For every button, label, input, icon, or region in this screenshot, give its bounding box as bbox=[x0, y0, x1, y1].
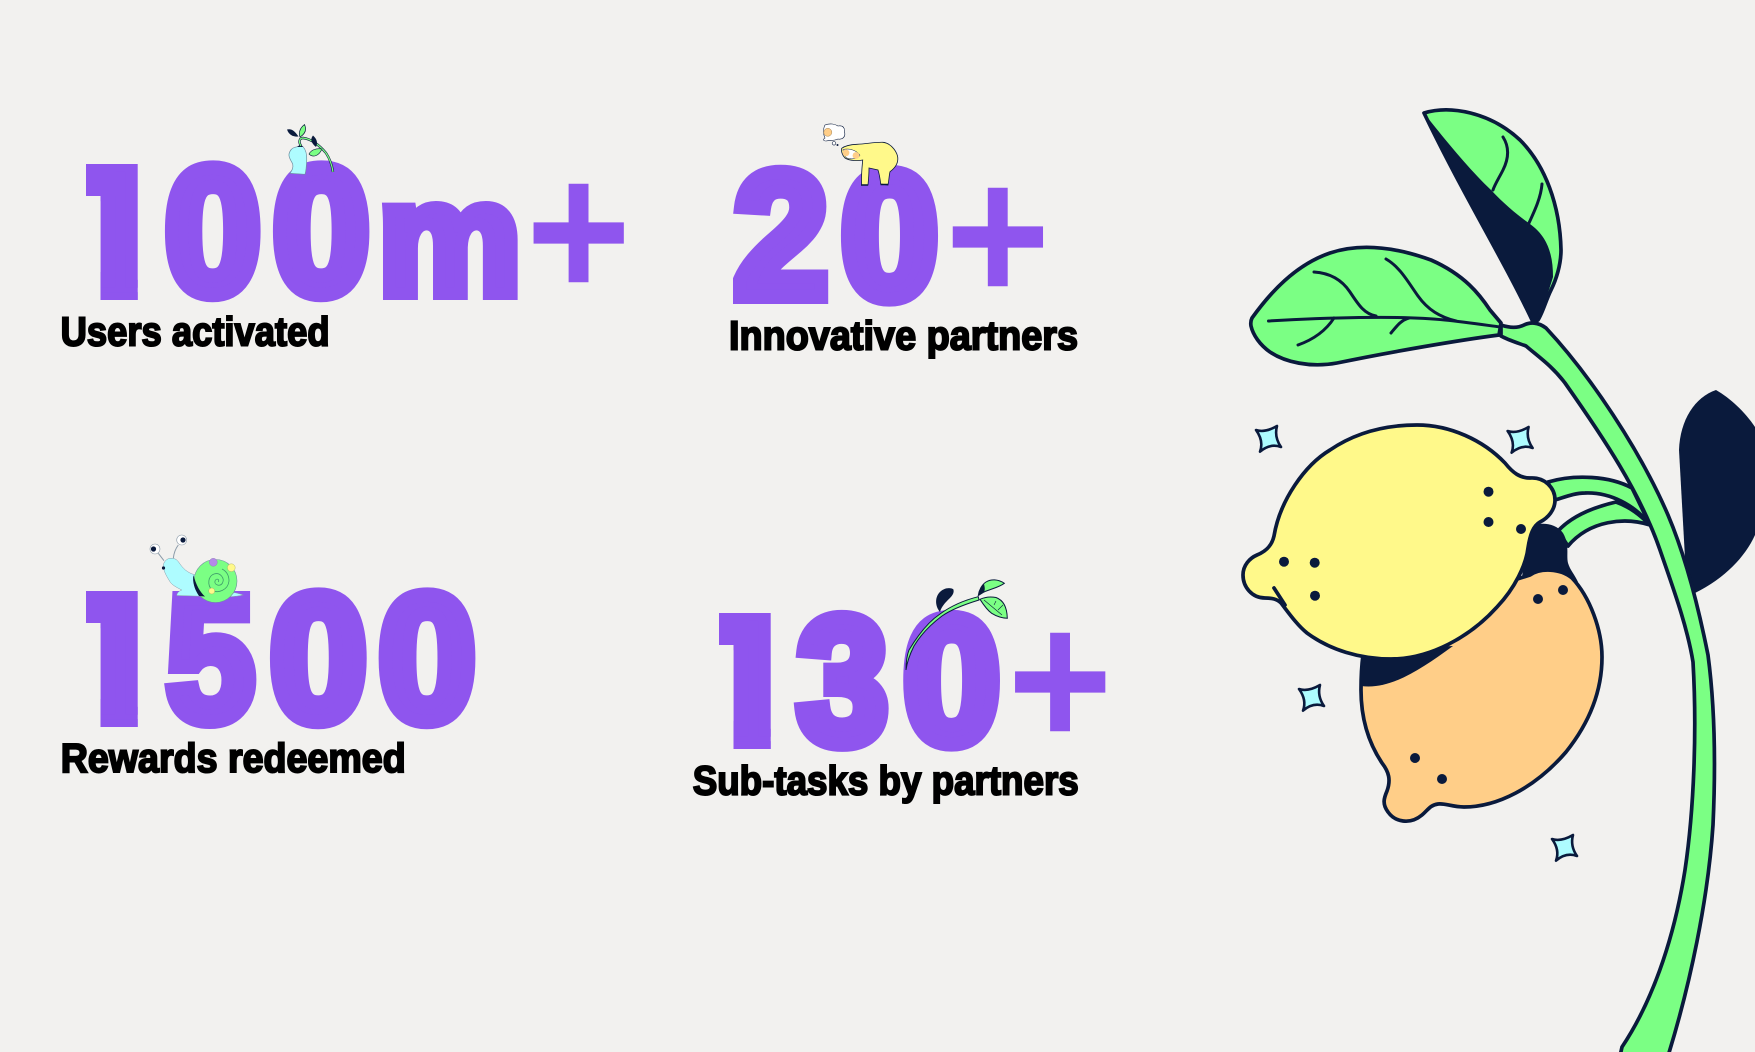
icon: sprig on 130 bbox=[906, 580, 1007, 670]
number: 130+: 3 bbox=[797, 580, 888, 781]
stat: 100m+ users activated bbox=[62, 160, 624, 347]
number: 1500: 1 bbox=[65, 548, 168, 769]
number: 130+ bbox=[719, 610, 1106, 752]
number: 100m+: + bbox=[526, 122, 631, 339]
number: 20+ bbox=[734, 126, 1050, 343]
number: 20+: 0 bbox=[841, 134, 938, 336]
sparkles bbox=[1256, 426, 1577, 861]
number: 100m+: 1 bbox=[65, 121, 168, 342]
top leaf bbox=[1424, 110, 1561, 322]
number: 1500: 0 bbox=[270, 558, 367, 759]
label: Users activated: Users activated bbox=[61, 308, 330, 354]
number: 100m+ bbox=[86, 160, 624, 302]
dark back leaf bbox=[1679, 390, 1755, 593]
number: 100m+: m bbox=[378, 149, 521, 328]
branch stems to lemons bbox=[1548, 477, 1650, 546]
icon: snail on 1500 bbox=[150, 535, 243, 602]
label: Rewards redeemed: Rewards redeemed bbox=[61, 735, 406, 781]
icon: sprout pepper on 100m bbox=[287, 124, 333, 174]
stat: 20+ innovative partners bbox=[729, 126, 1078, 358]
left leaf bbox=[1251, 247, 1501, 365]
number: 130+: 1 bbox=[698, 570, 801, 791]
stat: 1500 rewards redeemed bbox=[62, 587, 476, 774]
orange lemon bbox=[1361, 570, 1602, 821]
number: 1500: 5 bbox=[167, 560, 254, 758]
label: Sub-tasks by partners: Sub-tasks by partners bbox=[693, 758, 1079, 804]
number: 130+: 0 bbox=[903, 580, 1000, 781]
dark stalk bbox=[1520, 524, 1578, 592]
number: 20+: 2 bbox=[734, 135, 828, 335]
number: 1500 bbox=[86, 587, 476, 730]
icon: sloth with thought cloud bbox=[824, 124, 898, 185]
number: 130+: + bbox=[1008, 571, 1113, 788]
number: 100m+: 0 bbox=[165, 132, 261, 332]
yellow lemon bbox=[1243, 425, 1555, 659]
number: 1500: 0 bbox=[379, 558, 476, 759]
number: 100m+: 0 bbox=[273, 131, 370, 332]
main stem bbox=[1501, 323, 1714, 1052]
stat: 130+ sub-tasks by partners bbox=[692, 610, 1106, 804]
number: 20+: + bbox=[945, 126, 1050, 343]
label: Innovative partners: Innovative partners bbox=[729, 312, 1078, 358]
illustration: lemon branch bbox=[1243, 110, 1755, 1052]
